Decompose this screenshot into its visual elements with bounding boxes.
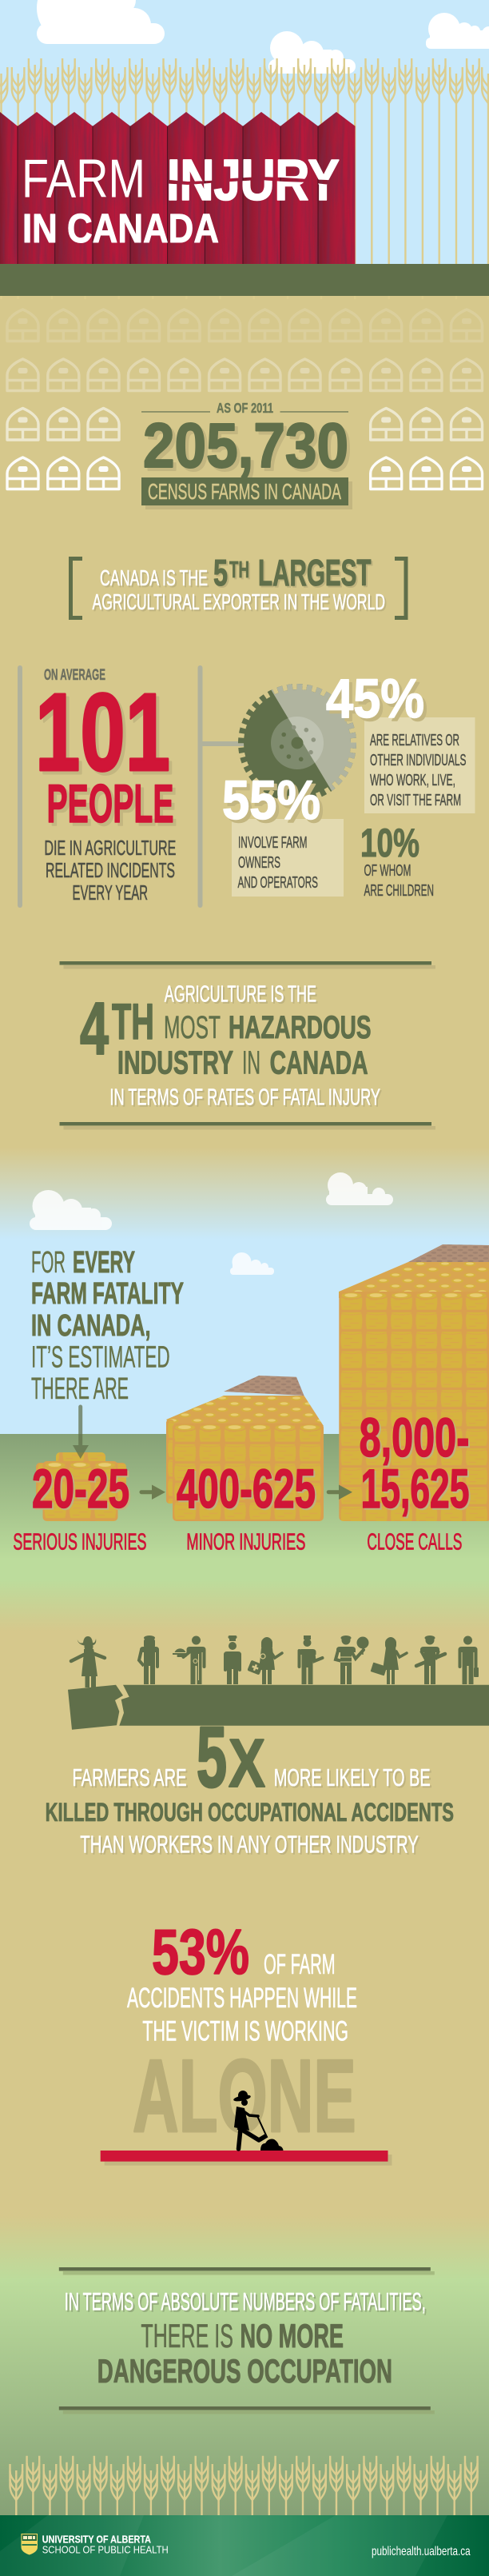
on average: ON AVERAGE	[44, 667, 105, 684]
text: for every farm fatality: FARM FATALITY	[31, 1277, 184, 1311]
school of public health: SCHOOL OF PUBLIC HEALTH	[42, 2545, 169, 2556]
most hazardous	[164, 1010, 371, 1045]
figure: mechanic with wrench	[416, 1635, 445, 1684]
text: AND OPERATORS	[238, 873, 318, 892]
footer band	[0, 2515, 489, 2576]
figure: chef	[224, 1635, 241, 1684]
description: THE VICTIM IS WORKING	[142, 2016, 348, 2047]
line 1: TH	[229, 557, 249, 583]
industry in canada: CANADA	[270, 1044, 368, 1081]
footer	[0, 2515, 489, 2576]
farmers are: FARMERS ARE	[72, 1763, 187, 1791]
figure: road worker with sign	[336, 1635, 369, 1684]
10%: 10%	[360, 821, 419, 865]
top tarp	[224, 1376, 304, 1396]
text: OF WHOM	[364, 861, 411, 880]
stat: census farms	[141, 400, 348, 505]
text: ARE CHILDREN	[364, 881, 434, 900]
logo: university shield	[21, 2534, 38, 2554]
number: 20-25: 20-25	[32, 1458, 129, 1520]
text	[370, 731, 467, 809]
description	[44, 836, 176, 905]
front wall	[173, 1424, 324, 1521]
right bracket	[395, 558, 406, 617]
barn row 4	[7, 457, 483, 489]
cloud: middle	[268, 31, 356, 74]
text	[238, 833, 318, 892]
main beam	[119, 1685, 489, 1726]
text: for every farm fatality	[31, 1246, 184, 1406]
cloud: upper right	[426, 13, 489, 49]
figure: businessman	[459, 1636, 479, 1684]
bottom rule	[59, 1122, 431, 1126]
green ground band	[0, 264, 489, 296]
cloud: upper left	[37, 0, 165, 44]
bottom rule	[59, 2406, 435, 2414]
cloud: top right	[326, 1172, 393, 1205]
arrow: serious to minor	[139, 1484, 165, 1500]
callout: 5th largest exporter	[70, 552, 406, 617]
ledge fragment	[68, 1685, 123, 1730]
gear light share 45%	[272, 684, 356, 791]
barn icon grid	[7, 310, 483, 489]
census farms label box: CENSUS FARMS IN CANADA	[148, 479, 341, 504]
description	[127, 1949, 357, 2047]
5x	[197, 1708, 265, 1805]
figure: businesswoman with case	[371, 1637, 407, 1684]
census farms label box	[141, 477, 348, 505]
number: 400-625: 400-625	[177, 1458, 316, 1520]
box	[364, 717, 475, 813]
description: RELATED INCIDENTS	[46, 858, 175, 882]
left divider	[18, 665, 22, 908]
figure: officer woman	[139, 1635, 159, 1684]
55%: 55%	[222, 769, 320, 831]
label: minor injuries: MINOR INJURIES	[186, 1530, 305, 1556]
people: PEOPLE	[46, 773, 174, 834]
closing statement	[59, 2267, 435, 2414]
text: for every farm fatality: FOR	[31, 1246, 66, 1280]
line 1: LARGEST	[258, 552, 371, 593]
box	[232, 819, 344, 897]
title: INJURY with crack: INJURY	[167, 149, 340, 209]
wheat row behind fence	[0, 58, 489, 299]
middle divider and connector	[198, 665, 244, 908]
agriculture is the: AGRICULTURE IS THE	[165, 982, 316, 1008]
alone: ALONE	[133, 2039, 356, 2154]
left bracket	[70, 558, 82, 617]
gear hub	[271, 717, 324, 769]
university of alberta: UNIVERSITY OF ALBERTA	[42, 2534, 151, 2545]
stat: 53% alone	[101, 1916, 388, 2162]
number 205,730: 205,730	[143, 409, 348, 481]
top surface	[166, 1396, 324, 1426]
arrow: minor to close calls	[327, 1484, 352, 1500]
cloud: left	[30, 1190, 112, 1230]
barn row 2	[7, 359, 483, 390]
figure: doctor with medical bag	[247, 1637, 282, 1684]
gear dark share 55%	[241, 687, 353, 799]
panel: 55 percent	[222, 769, 344, 897]
barn row 3	[7, 408, 483, 440]
text: for every farm fatality: IN CANADA,	[31, 1309, 150, 1343]
hay stack: small	[36, 1452, 126, 1521]
panel: 101 people	[18, 665, 244, 908]
industry in canada: INDUSTRY	[117, 1044, 233, 1081]
arrow: text to serious injuries	[73, 1407, 89, 1459]
red ground bar	[101, 2151, 388, 2162]
title: FARM: FARM	[22, 149, 145, 210]
header scene	[0, 0, 489, 299]
text: OWNERS	[238, 853, 280, 872]
label: serious injuries: SERIOUS INJURIES	[13, 1530, 146, 1556]
5x: 5	[197, 1708, 227, 1805]
industry in canada	[117, 1044, 368, 1081]
title: IN CANADA: IN CANADA	[22, 206, 219, 251]
45%: 45%	[326, 668, 424, 729]
text: for every farm fatality: THERE ARE	[31, 1372, 129, 1406]
occupations row on beam	[71, 1635, 479, 1687]
top rule	[59, 961, 431, 965]
front wall	[339, 1292, 489, 1521]
broken beam	[68, 1685, 489, 1730]
53%: 53%	[152, 1916, 249, 1987]
cloud: small	[230, 1252, 274, 1275]
as of 2011 label: AS OF 2011	[217, 400, 273, 416]
4: 4	[80, 987, 109, 1070]
back column	[166, 1420, 174, 1504]
hay stack: large	[339, 1244, 489, 1521]
there is no more: THERE IS	[141, 2317, 233, 2354]
line 1: 5	[213, 552, 228, 593]
industry in canada: IN	[242, 1044, 260, 1081]
text: INVOLVE FARM	[238, 833, 307, 852]
figure: waiter	[173, 1636, 206, 1684]
red wooden fence	[0, 104, 356, 264]
figure: bellhop	[297, 1635, 323, 1684]
most hazardous: HAZARDOUS	[229, 1010, 371, 1045]
description: EVERY YEAR	[72, 881, 148, 905]
panel: 4th most hazardous	[59, 961, 431, 1126]
line 1	[100, 552, 371, 593]
panel: 45 percent	[326, 668, 475, 813]
line 1: CANADA IS THE	[100, 565, 208, 590]
number: 8,000-15,625	[360, 1407, 469, 1520]
wheat row above footer	[10, 2456, 478, 2576]
description: DIE IN AGRICULTURE	[44, 836, 176, 860]
stat: 5x more likely	[46, 1708, 454, 1859]
top surface	[339, 1262, 489, 1298]
title: INJURY with crack	[169, 159, 340, 202]
5x: X	[229, 1726, 265, 1802]
description: OF FARM	[264, 1949, 336, 1980]
icon: farmer with shovel	[233, 2091, 283, 2151]
barn row 1	[7, 310, 483, 341]
title: INJURY with crack: INJURY	[166, 152, 339, 212]
figure: farmer on broken ledge	[71, 1636, 105, 1687]
text: for every farm fatality: EVERY	[73, 1246, 135, 1280]
text	[364, 861, 434, 900]
text: for every farm fatality: IT’S ESTIMATED	[31, 1340, 170, 1374]
there is no more: NO MORE	[240, 2317, 344, 2354]
top rule	[59, 2267, 435, 2274]
hay stack: medium	[166, 1376, 324, 1521]
gear pie chart	[241, 687, 353, 799]
th: TH	[112, 994, 154, 1050]
panel: 10 percent	[360, 821, 434, 900]
101: 101	[35, 671, 170, 794]
most hazardous: MOST	[164, 1010, 221, 1045]
top tarp	[408, 1244, 489, 1264]
